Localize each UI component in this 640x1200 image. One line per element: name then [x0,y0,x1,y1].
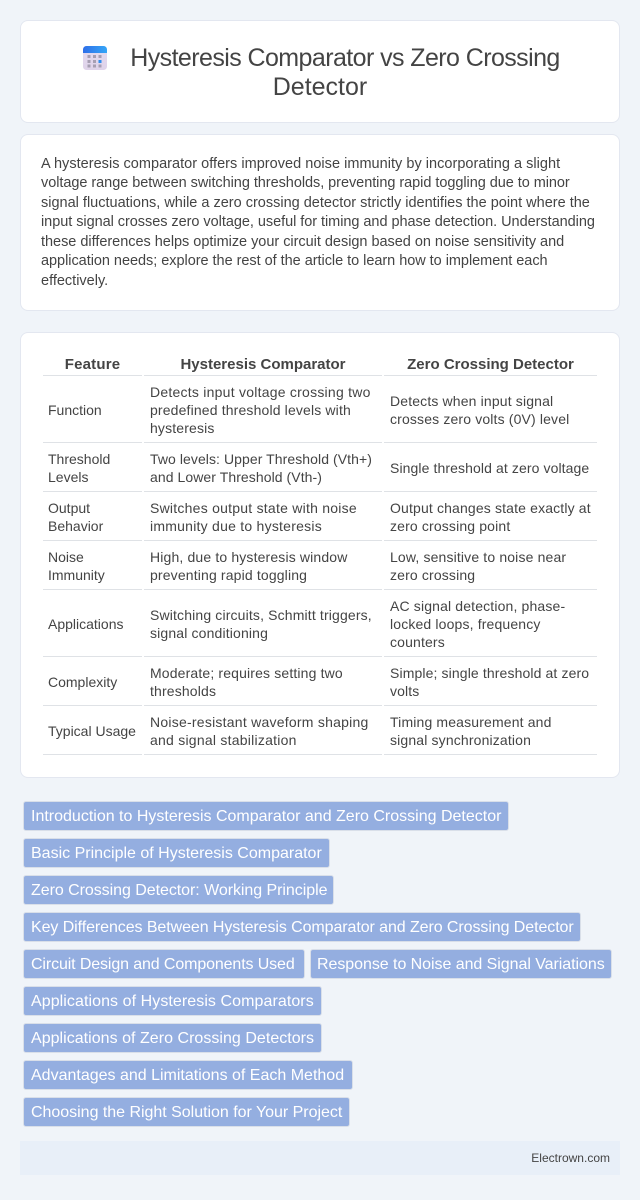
tag [23,1023,322,1053]
tag: Circuit Design and Components Used [31,956,295,973]
row: noise immunity: Immunity [48,567,105,583]
table header row: Feature [65,356,120,373]
row: applications: Applications [48,616,124,632]
comparison table: Detects input voltage crossing two [150,384,371,400]
comparison table: Single threshold at zero voltage [390,460,589,476]
intro paragraph: effectively. [41,272,108,288]
comparison table: signal synchronization [390,732,531,748]
comparison table: AC signal detection, phase- [390,598,565,614]
title: Detector [273,73,367,101]
table header row [43,356,597,376]
tag [23,801,509,831]
tag [23,986,322,1016]
title: Hysteresis Comparator vs Zero Crossing [130,44,560,72]
intro paragraph: input signal crosses zero voltage, useful for timing and phase detection. Understanding [41,214,595,230]
table header row: Zero Crossing Detector [407,356,574,373]
intro paragraph: signal fluctuations, while a zero crossing detector strictly identifies the point where the [41,194,590,210]
comparison table: predefined threshold levels with [150,402,351,418]
comparison table: zero crossing [390,567,475,583]
tag [23,1097,350,1127]
comparison table: Low, sensitive to noise near [390,549,566,565]
comparison table: and Lower Threshold (Vth-) [150,469,322,485]
comparison table: immunity due to hysteresis [150,518,322,534]
comparison table [43,356,597,755]
comparison table: Detects when input signal [390,393,553,409]
tag [23,1060,353,1090]
table header row: Hysteresis Comparator [180,356,346,373]
tag [23,912,581,942]
comparison table: Simple; single threshold at zero [390,665,589,681]
tag: Basic Principle of Hysteresis Comparator [31,845,322,862]
comparison table: locked loops, frequency [390,616,541,632]
panel: comparison table [20,332,620,778]
row: output behavior: Output [48,500,90,516]
intro paragraph: voltage range between switching thresholds, preventing rapid toggling due to minor [41,175,570,191]
footer text: Electrown.com [531,1151,610,1165]
tag: Introduction to Hysteresis Comparator and Zero Crossing Detector [31,808,501,825]
tag: Choosing the Right Solution for Your Project [31,1104,342,1121]
row: complexity: Complexity [48,674,117,690]
footer [20,1141,620,1175]
comparison table: Moderate; requires setting two [150,665,343,681]
row: function: Function [48,402,102,418]
row: output behavior [48,500,104,534]
panel: intro text [20,134,620,311]
tag: Zero Crossing Detector: Working Principle [31,882,327,899]
tag: Response to Noise and Signal Variations [317,956,605,973]
tag: Advantages and Limitations of Each Method [31,1067,344,1084]
comparison table: Noise-resistant waveform shaping [150,714,369,730]
comparison table: signal conditioning [150,625,268,641]
title [130,44,560,101]
row: typical usage: Typical Usage [48,723,136,739]
intro paragraph: A hysteresis comparator offers improved noise immunity by incorporating a slight [41,156,560,172]
comparison table: zero crossing point [390,518,510,534]
row: noise immunity: Noise [48,549,84,565]
tag [310,949,612,979]
comparison table: Switching circuits, Schmitt triggers, [150,607,372,623]
comparison table: counters [390,634,445,650]
comparison table: crosses zero volts (0V) level [390,411,569,427]
comparison table: preventing rapid toggling [150,567,307,583]
tag: Key Differences Between Hysteresis Comparator and Zero Crossing Detector [31,919,574,936]
comparison table: and signal stabilization [150,732,297,748]
comparison table: High, due to hysteresis window [150,549,348,565]
tag [23,875,334,905]
icon: calendar [83,46,107,70]
comparison table: Output changes state exactly at [390,500,591,516]
tag [23,838,330,868]
intro paragraph: application needs; explore the rest of the article to learn how to implement each [41,253,548,269]
intro paragraph: these differences helps optimize your circuit design based on noise sensitivity and [41,234,564,250]
panel: header [20,20,620,123]
comparison table: Two levels: Upper Threshold (Vth+) [150,451,372,467]
comparison table: thresholds [150,683,216,699]
row: output behavior: Behavior [48,518,103,534]
row: noise immunity [48,549,105,583]
intro paragraph [41,156,595,288]
comparison table: Switches output state with noise [150,500,357,516]
comparison table: hysteresis [150,420,215,436]
row: threshold levels [48,451,110,485]
comparison table: Timing measurement and [390,714,552,730]
row: threshold levels: Threshold [48,451,110,467]
row: threshold levels: Levels [48,469,88,485]
tag: Applications of Zero Crossing Detectors [31,1030,314,1047]
tag: Applications of Hysteresis Comparators [31,993,314,1010]
tag [23,949,305,979]
comparison table: volts [390,683,419,699]
